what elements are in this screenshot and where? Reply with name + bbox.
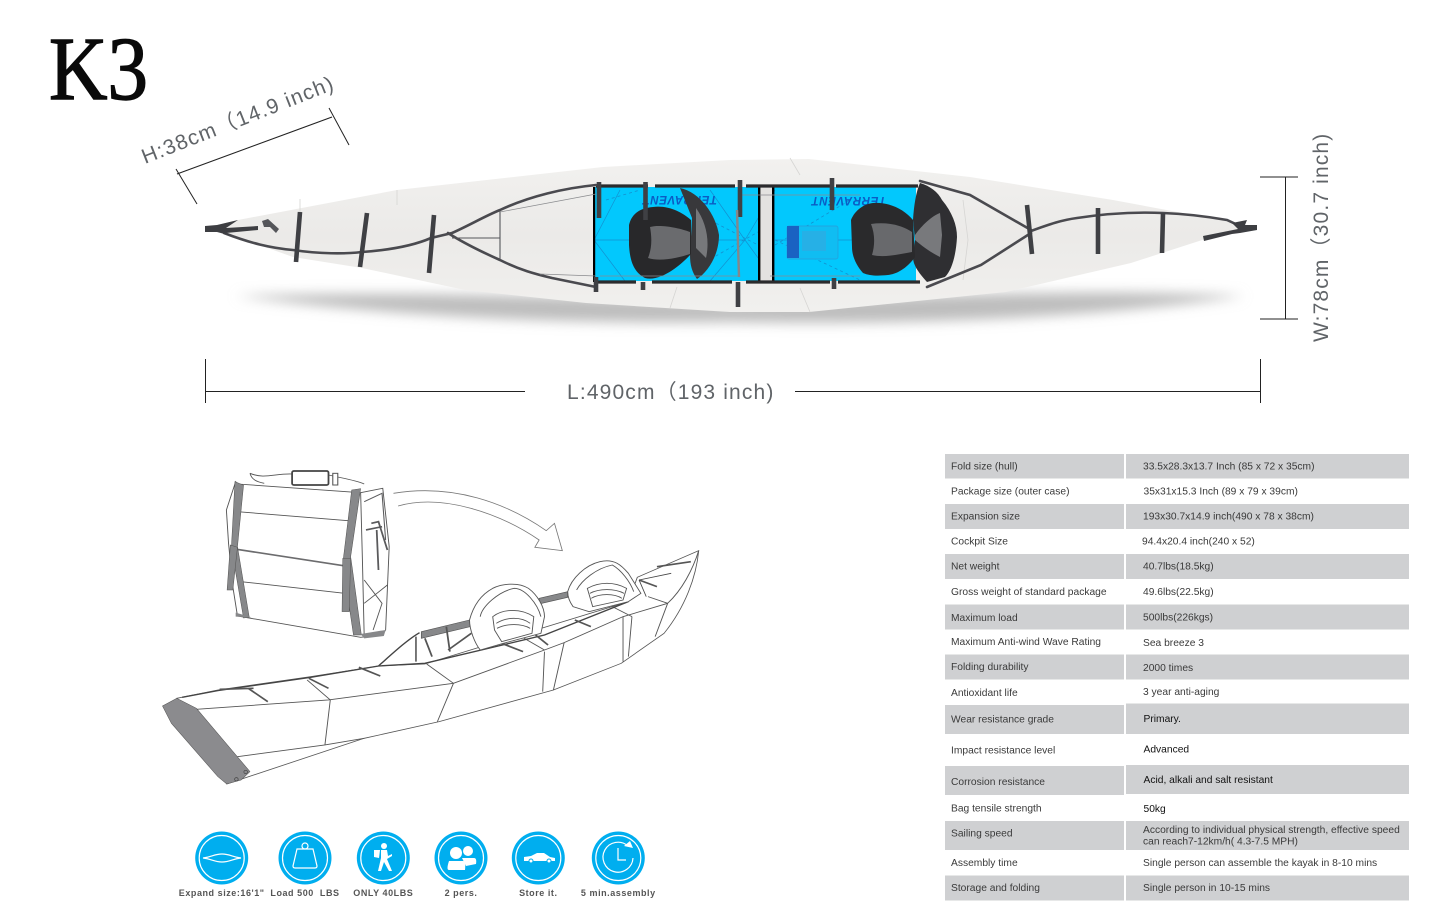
row labels: Fold size (hull) [951, 462, 1018, 472]
row labels: Package size (outer case) [951, 486, 1070, 498]
row values: Acid, alkali and salt resistant [1144, 775, 1273, 786]
row labels: Cockpit Size [951, 536, 1008, 548]
row labels: Storage and folding [951, 883, 1040, 894]
row values: 2000 times [1143, 663, 1193, 674]
row labels: Bag tensile strength [951, 804, 1042, 814]
row labels: Corrosion resistance [951, 777, 1045, 788]
row labels: Folding durability [951, 662, 1029, 673]
width dimension: W:78cm（30.7 inch) [1310, 133, 1333, 342]
feature icons [179, 832, 656, 898]
row values: Single person can assemble the kayak in 8-10 mins [1143, 858, 1377, 869]
brand text: TERRAVENT [642, 193, 717, 205]
divider panel [758, 187, 774, 281]
row values: 3 year anti-aging [1143, 687, 1220, 698]
stern cap [162, 698, 250, 784]
icon: load weight: Load 500 LBS [270, 888, 340, 898]
instruction label [787, 226, 838, 259]
row labels: Maximum Anti-wind Wave Rating [951, 637, 1101, 648]
row labels: Assembly time [951, 858, 1018, 869]
row values: Primary. [1144, 714, 1181, 725]
row backgrounds [945, 454, 1409, 900]
hull [205, 159, 1256, 312]
row values: 50kg [1144, 804, 1166, 815]
row labels: Expansion size [951, 512, 1020, 522]
row values: 40.7lbs(18.5kg) [1143, 562, 1214, 572]
cockpit rails [596, 186, 920, 282]
row labels: Maximum load [951, 613, 1018, 624]
row values: 193x30.7x14.9 inch(490 x 78 x 38cm) [1143, 512, 1314, 522]
row values: 94.4x20.4 inch(240 x 52) [1142, 536, 1255, 548]
seats [470, 584, 544, 650]
straps [296, 178, 1163, 307]
icon: load weight [270, 832, 340, 898]
icon: clock: 5 min.assembly [581, 888, 656, 898]
row values: 35x31x15.3 Inch (89 x 79 x 39cm) [1144, 486, 1298, 498]
row values: According to individual physical strength, effective speed [1143, 825, 1400, 836]
icon: two people: 2 pers. [445, 888, 477, 898]
row values: Advanced [1144, 744, 1189, 756]
height dimension [138, 72, 349, 204]
curved arrow [393, 491, 562, 551]
kayak hull [162, 551, 699, 784]
icon: car: Store it. [519, 888, 558, 898]
icon: expand size [179, 832, 265, 898]
icon: expand size: Expand size:16'1" [179, 888, 265, 898]
row labels [951, 462, 1107, 894]
cockpit blue floor [593, 187, 916, 282]
bow and stern tips [205, 220, 258, 236]
row labels: Antioxidant life [951, 688, 1018, 699]
icon: car [512, 832, 565, 898]
row labels: Impact resistance level [951, 746, 1055, 756]
cockpit rim and straps [421, 592, 568, 638]
height dimension: H:38cm（14.9 inch) [138, 72, 338, 169]
kayak top view [205, 158, 1257, 323]
row labels: Net weight [951, 562, 1000, 572]
seat right [851, 183, 957, 282]
row values [1142, 462, 1400, 894]
icon: hiker: ONLY 40LBS [353, 888, 413, 898]
row labels: Sailing speed [951, 828, 1013, 840]
title: K3 [49, 20, 148, 119]
frame [224, 185, 596, 253]
row values: 49.6lbs(22.5kg) [1143, 587, 1214, 598]
cockpit blue floor: TERRAVENT [811, 194, 886, 206]
icon: two people [434, 832, 488, 898]
kayak shadow [235, 292, 1245, 323]
row values: 33.5x28.3x13.7 Inch (85 x 72 x 35cm) [1143, 462, 1315, 472]
seat left [629, 188, 719, 279]
icon: clock [581, 832, 656, 898]
length dimension: L:490cm（193 inch) [567, 381, 774, 404]
packaged kayak line drawing [162, 471, 699, 784]
specification table [945, 454, 1409, 900]
row labels: Gross weight of standard package [951, 587, 1107, 598]
row values: can reach7-12km/h( 4.3-7.5 MPH) [1143, 836, 1298, 848]
row values: 500lbs(226kgs) [1143, 612, 1213, 624]
row values: Sea breeze 3 [1143, 638, 1204, 649]
bag [226, 471, 389, 638]
icon: hiker [353, 832, 413, 898]
row values: Single person in 10-15 mins [1143, 883, 1270, 894]
row labels: Wear resistance grade [951, 714, 1054, 726]
